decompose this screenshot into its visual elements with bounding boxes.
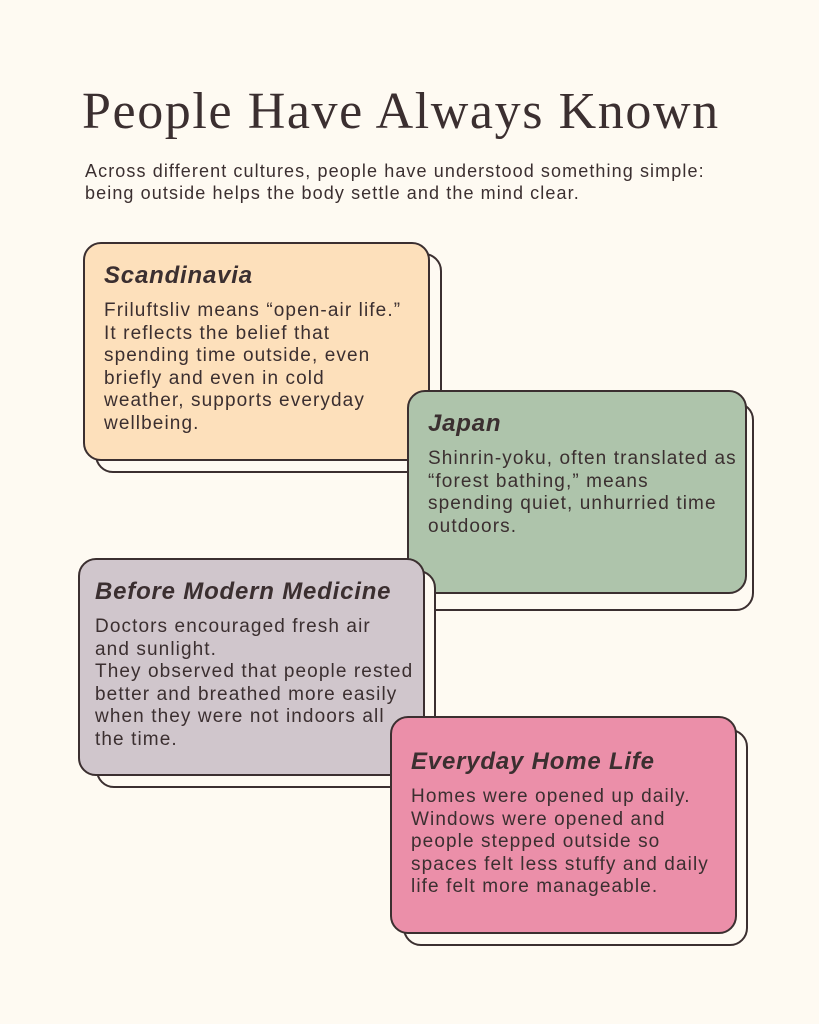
panel: Scandinavia: spending time outside, even <box>104 345 370 366</box>
panel: Scandinavia: Scandinavia <box>104 262 253 289</box>
panel: Before Modern Medicine <box>78 558 436 788</box>
panel: Scandinavia: wellbeing. <box>104 413 200 434</box>
panel: Before Modern Medicine: better and breathed more easily <box>95 684 397 705</box>
title: People Have Always Known <box>82 83 720 140</box>
panel: Everyday Home Life: Homes were opened up daily. <box>411 786 691 807</box>
panel: Japan <box>407 390 754 611</box>
subtitle <box>85 161 705 203</box>
panel: Japan: Japan <box>428 410 501 437</box>
subtitle: being outside helps the body settle and the mind clear. <box>85 183 580 203</box>
panel: Before Modern Medicine: They observed that people rested <box>95 661 413 682</box>
panel: Everyday Home Life <box>390 716 748 946</box>
panel: Before Modern Medicine: when they were not indoors all <box>95 706 385 727</box>
panel: Before Modern Medicine: Doctors encouraged fresh air <box>95 616 371 637</box>
panel: Before Modern Medicine: Before Modern Medicine <box>95 578 391 605</box>
panel: Scandinavia: Friluftsliv means “open-air life.” <box>104 300 401 321</box>
panel: Japan: outdoors. <box>428 516 517 537</box>
panel: Scandinavia: weather, supports everyday <box>104 390 365 411</box>
panel: Before Modern Medicine: the time. <box>95 729 178 750</box>
panel: Everyday Home Life: people stepped outside so <box>411 831 660 852</box>
panel: Japan: “forest bathing,” means <box>428 471 649 492</box>
panel: Everyday Home Life: Windows were opened and <box>411 809 666 830</box>
panel: Scandinavia: It reflects the belief that <box>104 323 330 344</box>
subtitle: Across different cultures, people have understood something simple: <box>85 161 705 181</box>
panel: Japan: Shinrin-yoku, often translated as <box>428 448 737 469</box>
panel: Japan: spending quiet, unhurried time <box>428 493 717 514</box>
panel: Before Modern Medicine: and sunlight. <box>95 639 217 660</box>
panel: Everyday Home Life: Everyday Home Life <box>411 748 655 775</box>
panel: Everyday Home Life: life felt more manageable. <box>411 876 658 897</box>
panel: Scandinavia <box>83 242 442 473</box>
panel: Everyday Home Life: spaces felt less stuffy and daily <box>411 854 709 875</box>
panel: Scandinavia: briefly and even in cold <box>104 368 325 389</box>
